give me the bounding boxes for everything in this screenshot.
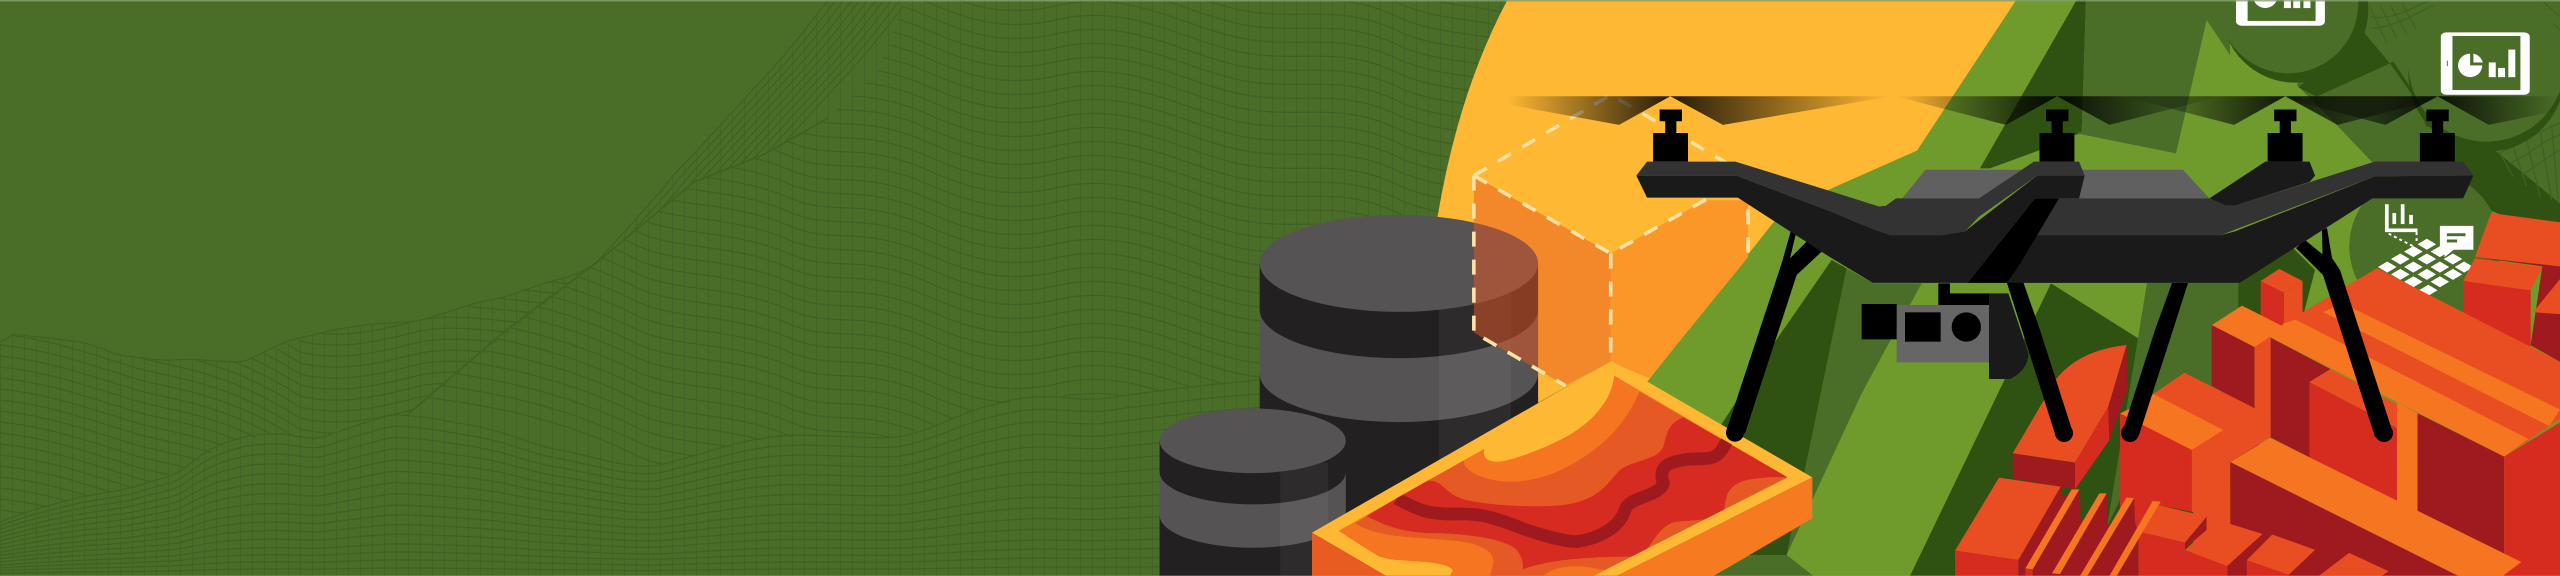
- drone: [1507, 96, 2560, 442]
- camera gimbal: [1862, 283, 2028, 379]
- lower blocks: [2138, 505, 2263, 576]
- faint mesh, top right: [2370, 0, 2560, 203]
- motors: [1653, 109, 2455, 162]
- centre strut: [1967, 198, 2059, 283]
- translucent scan volume box: [1474, 95, 1748, 386]
- green disc behind right tablet: [2408, 0, 2560, 152]
- rotor blur: [1507, 96, 2560, 125]
- green geometric backdrop: upper: [1644, 0, 2560, 576]
- landing legs: [1726, 228, 2393, 442]
- green geometric backdrop: below the drone: [1713, 260, 2300, 576]
- icon: tablet with charts, right: [2441, 32, 2530, 95]
- contour bands: [1333, 373, 1800, 576]
- icon: tablet with charts, top: [2236, 0, 2325, 26]
- rear right building: [2463, 213, 2560, 362]
- yellow sun disc: [1438, 0, 2016, 459]
- large data cylinder: [1260, 215, 1538, 576]
- green disc behind upper tablet: [2218, 0, 2368, 83]
- terrain map tile: [1312, 361, 1812, 576]
- wireframe terrain mesh: [0, 0, 1540, 576]
- small tower: [2261, 269, 2303, 331]
- mid block: [2120, 337, 2271, 530]
- grey battery plates: [1902, 170, 2209, 198]
- long orange bar block: [2193, 438, 2521, 576]
- icon: data grid with chart and speech bubble: [2378, 204, 2473, 296]
- small data cylinder: [1160, 408, 1346, 576]
- front body and arm: [1636, 162, 2085, 283]
- lower left block with stripes: [1955, 478, 2161, 576]
- rear body: [2007, 162, 2473, 283]
- left tower: [2212, 306, 2284, 439]
- mid green field, top right: [2297, 0, 2560, 207]
- long slab building: [2270, 268, 2560, 576]
- rear arm: [2209, 162, 2315, 206]
- green backdrop between the legs: [2107, 283, 2245, 527]
- river: [1397, 440, 1728, 542]
- half-round block: [2013, 345, 2127, 489]
- green disc behind data grid: [2349, 171, 2501, 322]
